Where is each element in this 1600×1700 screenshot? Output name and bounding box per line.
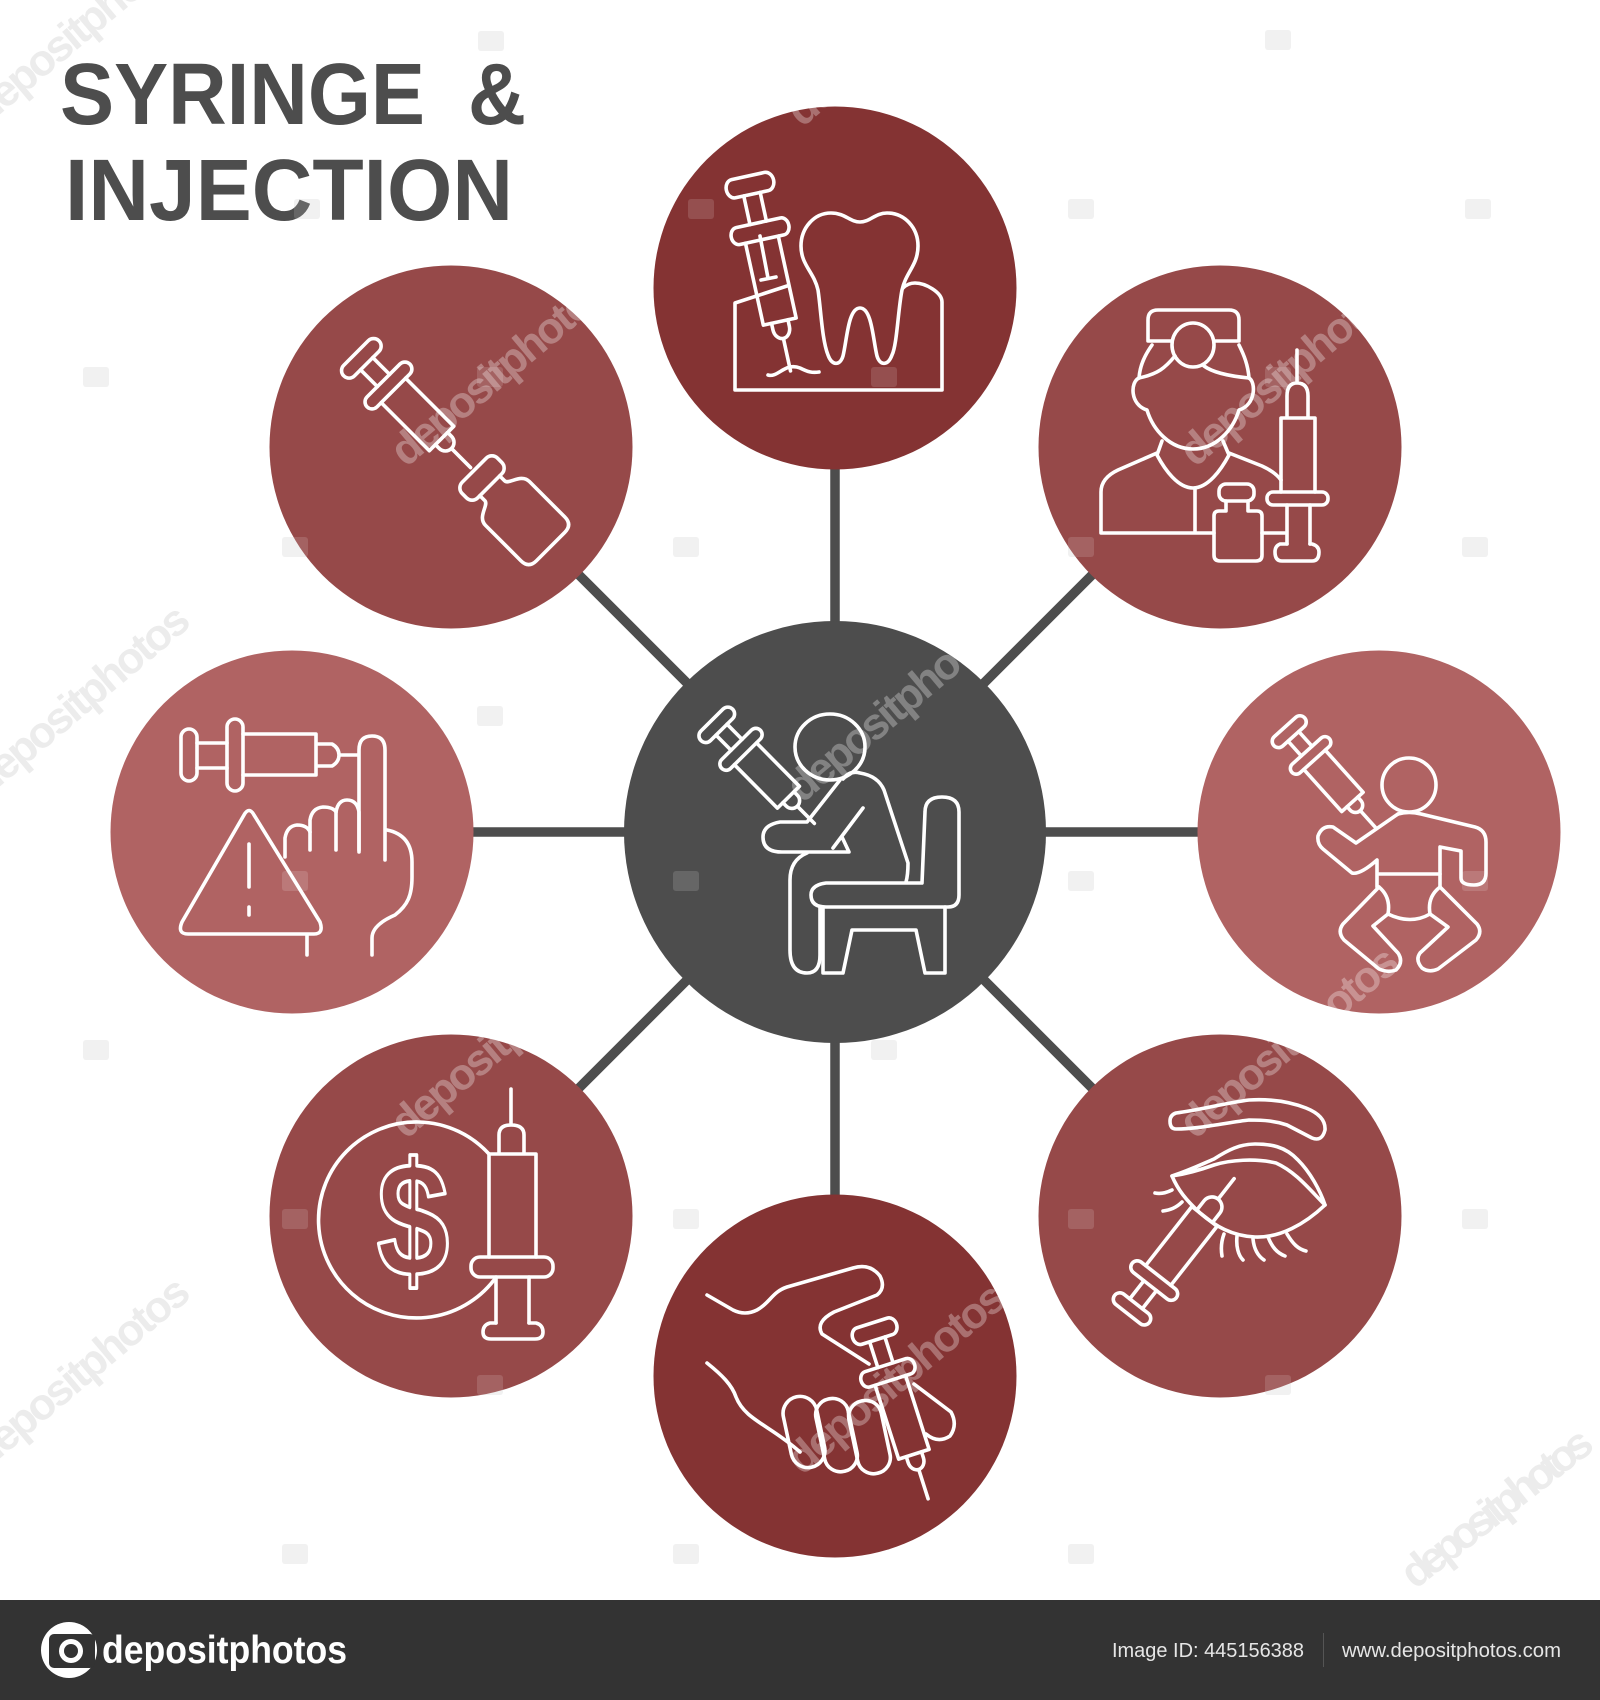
title: SYRINGE (60, 46, 425, 143)
title: INJECTION (65, 142, 513, 239)
connector lines (292, 288, 1379, 1376)
panel: money and syringe (270, 1034, 632, 1398)
panel: allergy test warning (110, 650, 474, 1014)
footer bar (0, 1600, 1600, 1700)
footer website: www.depositphotos.com (1341, 1640, 1561, 1662)
panel: dental injection (654, 106, 1016, 470)
icon: dollar coin and syringe (319, 1089, 553, 1339)
stock watermarks: depositphotos (777, 1273, 1015, 1484)
panel: central patient (624, 621, 1046, 1043)
panel: doctor with syringe (1038, 266, 1402, 628)
icon: doctor, vial and syringe (1101, 310, 1328, 561)
icon: seated patient with syringe (693, 701, 959, 973)
icon: eye and syringe (1106, 1100, 1325, 1331)
footer logo: depositphotos (102, 1629, 347, 1672)
icon: baby and syringe (1266, 710, 1486, 971)
stock watermarks: depositphotos (1170, 265, 1408, 476)
title: & (468, 46, 526, 143)
stock watermarks: depositphotos (381, 265, 619, 476)
panel: hand holding syringe (654, 1194, 1016, 1558)
panel: baby vaccination (1198, 650, 1560, 1014)
stock watermarks: depositphotos (381, 937, 619, 1148)
footer logo (41, 1622, 347, 1678)
faint watermarks on the background: depositphotos (1391, 1418, 1600, 1598)
icon: hand and syringe (707, 1267, 955, 1507)
icon: syringe drawing from vial (335, 332, 573, 569)
stock watermarks: depositphotos (777, 601, 1015, 812)
stock watermarks: depositphotos (1170, 937, 1408, 1148)
icon: syringe, finger and warning triangle (180, 719, 412, 955)
icon: tooth, gum and syringe (719, 170, 942, 390)
panel: syringe and vial (270, 266, 632, 628)
panel: eyelid injection (1038, 1034, 1402, 1398)
footer image id: Image ID: 445156388 (1112, 1640, 1304, 1662)
icon: dollar coin and syringe: $ (377, 1129, 449, 1311)
title (60, 46, 526, 239)
stock watermarks (381, 0, 1408, 1484)
